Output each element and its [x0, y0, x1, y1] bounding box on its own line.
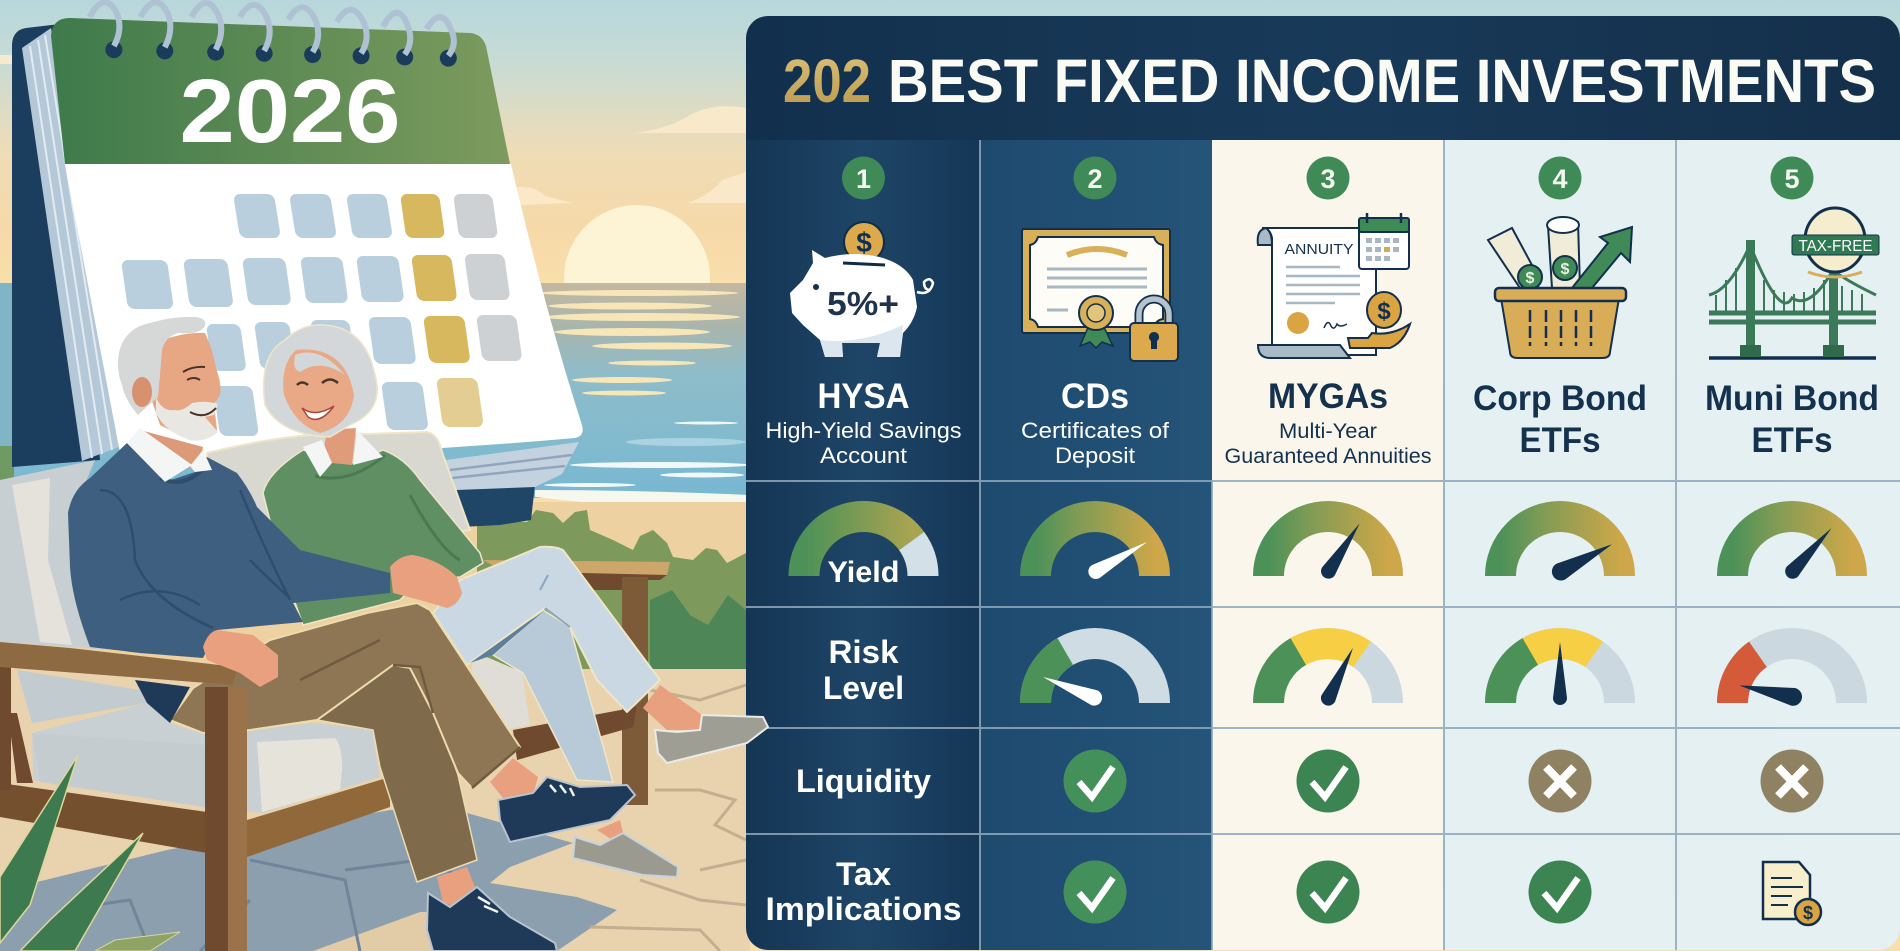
Muni Bond label: Muni Bond	[1705, 379, 1879, 418]
check Corp Bond tax	[1528, 860, 1592, 924]
icon: tax document with coin	[1763, 862, 1821, 925]
man face	[150, 333, 220, 440]
check CDs	[1064, 750, 1126, 812]
patio ground	[0, 669, 750, 951]
icon: basket of rolled bonds with arrow	[1488, 217, 1632, 358]
column labels	[766, 377, 1879, 468]
icon: annuity contract with calendar and coin: $	[1377, 298, 1391, 325]
HYSA label: HYSA	[818, 377, 910, 416]
woman rear ankle and slip-on shoe	[573, 820, 678, 877]
cross Muni Bond	[1760, 750, 1824, 812]
column 1 background	[746, 140, 980, 951]
yield gauge Corp Bond	[1500, 516, 1620, 584]
calendar page stack	[22, 28, 124, 461]
man figure	[68, 317, 635, 951]
Corp Bond label	[1473, 379, 1647, 460]
CDs label: Certificates of	[1021, 418, 1170, 443]
man neck and collar	[127, 428, 212, 482]
row: tax icons	[1064, 860, 1821, 925]
man rear ankle	[437, 867, 475, 907]
column 3 background	[1212, 140, 1444, 951]
risk gauge CDs	[1036, 644, 1154, 708]
row label: Tax Implications: Tax	[836, 856, 891, 892]
table header band	[746, 16, 1900, 141]
shrubs	[477, 510, 746, 672]
woman figure	[263, 325, 678, 877]
yield gauge CDs	[1036, 516, 1154, 582]
MYGAs label: Guaranteed Annuities	[1224, 445, 1432, 468]
title: 202	[783, 47, 871, 115]
check MYGAs tax	[1296, 860, 1360, 924]
CDs label	[1021, 377, 1170, 468]
Corp Bond label: ETFs	[1520, 421, 1600, 460]
row label: Liquidity: Liquidity	[796, 763, 931, 799]
man navy shirt below armrest	[135, 680, 190, 723]
MYGAs label: MYGAs	[1268, 377, 1388, 416]
row: risk gauges	[1036, 642, 1852, 708]
row label: Risk Level: Risk	[828, 634, 899, 670]
icon: piggy bank with coin	[790, 222, 933, 357]
icon: basket of rolled bonds with arrow: $	[1526, 270, 1535, 287]
HYSA label: Account	[820, 443, 907, 468]
panel: investment comparison table	[746, 16, 1900, 951]
calendar date cells	[121, 194, 522, 436]
woman lower trouser leg	[493, 610, 613, 782]
ocean with light reflections	[0, 283, 750, 506]
number badges: 3	[1320, 164, 1336, 194]
number badges: 5	[1784, 164, 1800, 194]
yield gauge Muni Bond	[1732, 516, 1852, 582]
number badges	[842, 156, 1814, 200]
risk gauge Corp Bond	[1500, 642, 1620, 705]
risk gauge MYGAs	[1268, 644, 1388, 708]
clouds	[0, 55, 746, 205]
risk gauge Muni Bond	[1732, 644, 1852, 707]
number badges: 4	[1552, 164, 1568, 194]
man beard	[156, 397, 218, 441]
icon: basket of rolled bonds with arrow: $	[1561, 261, 1570, 278]
man rear shoe	[427, 887, 557, 951]
man upper trouser leg	[170, 603, 520, 788]
column 4 and 5 background	[1444, 140, 1900, 951]
man ear	[132, 377, 152, 407]
calendar green header	[51, 18, 510, 164]
calendar stand foot	[456, 485, 535, 527]
icon: piggy bank with coin: $	[856, 227, 872, 258]
icon: certificate with lock	[1022, 229, 1178, 361]
foreground plant leaves	[0, 755, 180, 951]
icon: piggy bank with coin: 5%+	[827, 285, 899, 322]
woman upper trouser leg	[433, 547, 660, 712]
rings	[90, 2, 457, 67]
woman sweater	[263, 450, 483, 625]
chair lower rails	[0, 667, 637, 857]
column 2 background	[980, 140, 1212, 951]
check MYGAs	[1296, 750, 1360, 812]
HYSA label	[766, 377, 962, 468]
icon: annuity contract with calendar and coin	[1258, 213, 1410, 358]
icon: annuity contract with calendar and coin: ANNUITY	[1284, 241, 1354, 258]
man front shoe	[498, 777, 635, 842]
woman hair and face	[264, 325, 377, 437]
row: yield gauges	[804, 516, 1852, 584]
sun	[564, 205, 710, 283]
CDs label: Deposit	[1055, 443, 1135, 468]
man rear trouser leg	[317, 665, 477, 882]
row label: Tax Implications: Implications	[766, 891, 962, 927]
row label: Risk Level	[823, 634, 904, 706]
Muni Bond label: ETFs	[1752, 421, 1832, 460]
row label: Yield: Yield	[828, 556, 900, 589]
chair front frame	[0, 642, 247, 951]
sand	[14, 502, 750, 677]
Corp Bond label: Corp Bond	[1473, 379, 1647, 418]
cross Corp Bond	[1528, 750, 1592, 812]
Muni Bond label	[1705, 379, 1879, 460]
man front ankle	[490, 758, 538, 803]
MYGAs label: Multi-Year	[1279, 420, 1377, 443]
chair right frame	[483, 560, 670, 805]
man's hand on arm rest	[203, 630, 278, 687]
row label: Risk Level: Level	[823, 670, 904, 706]
icon: tax document with coin: $	[1803, 903, 1813, 923]
man hair	[118, 317, 205, 415]
man sweater	[68, 443, 390, 658]
calendar white sheet	[65, 164, 583, 458]
row: liquidity icons	[1064, 750, 1824, 812]
calendar back board	[12, 24, 100, 467]
man eye brow and mouth	[183, 367, 216, 415]
icon: tax-free bridge: TAX-FREE	[1798, 238, 1872, 255]
MYGAs label	[1224, 377, 1432, 468]
calendar	[12, 2, 583, 527]
chair seat cushion	[32, 650, 530, 813]
woman front ankle and shoe overlapping table	[643, 685, 768, 763]
icon: tax-free bridge	[1709, 208, 1879, 358]
check CDs tax	[1064, 860, 1126, 924]
chair back cushions	[0, 432, 470, 723]
woman's hand on man's hand	[390, 555, 462, 608]
woman neck and collar	[303, 428, 383, 477]
CDs label: CDs	[1061, 377, 1129, 416]
number badges: 1	[856, 164, 871, 194]
yield gauge MYGAs	[1268, 516, 1388, 582]
year 2026: 2026	[180, 62, 400, 162]
row label: Tax Implications	[766, 856, 962, 927]
yield gauge HYSA	[804, 517, 923, 576]
number badges: 2	[1087, 164, 1103, 194]
HYSA label: High-Yield Savings	[766, 418, 962, 443]
calendar bottom pages	[446, 442, 579, 490]
